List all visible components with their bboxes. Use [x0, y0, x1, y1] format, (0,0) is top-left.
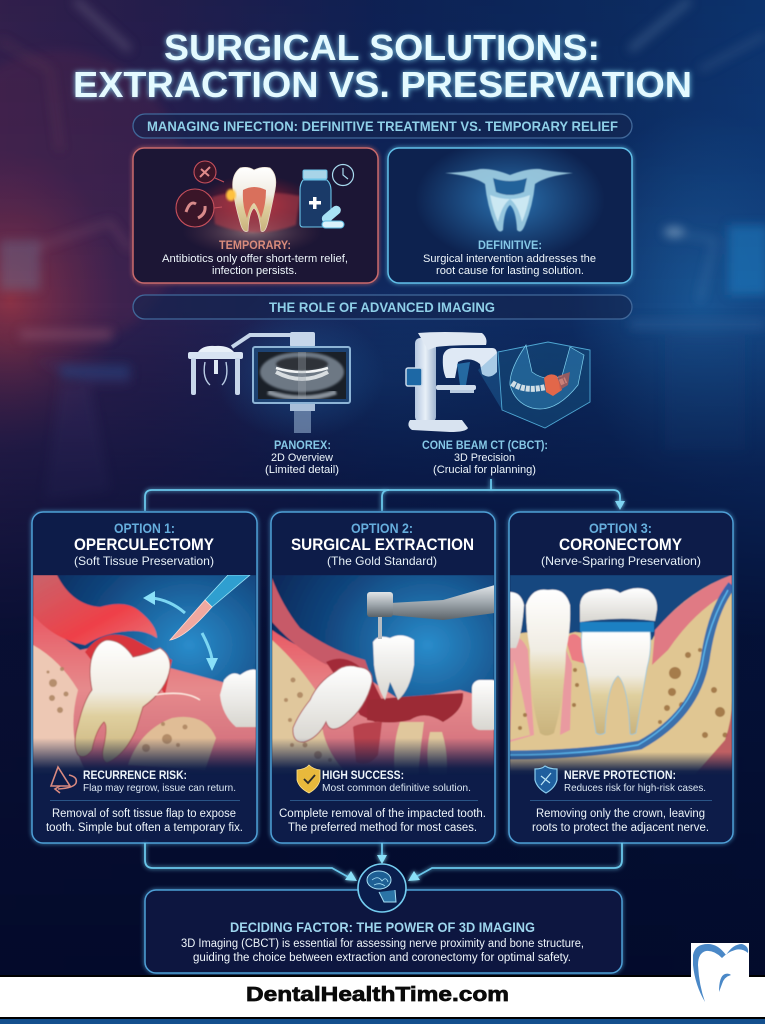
text: option 2 description: The preferred method for most cases. [288, 822, 477, 834]
text: panorex: 2D Overview [271, 452, 333, 464]
text: deciding factor [181, 919, 584, 964]
text: option 2 heading [291, 520, 474, 568]
3d cube with jaw scan [478, 342, 590, 428]
icon: gold shield check [297, 765, 320, 793]
text: temporary: Antibiotics only offer short-term relief, [162, 253, 348, 265]
section heading: advanced imaging: THE ROLE OF ADVANCED IMAGING [269, 300, 495, 315]
illustration: flap over wisdom tooth [33, 575, 256, 780]
text: option 3 heading: CORONECTOMY [559, 535, 683, 554]
icon: translucent tooth [445, 169, 573, 232]
text: nerve protection: Reduces risk for high-risk cases. [564, 782, 706, 794]
panel: option 1 operculectomy [32, 512, 257, 843]
text: option 2 description [279, 808, 486, 834]
text: panorex: (Limited detail) [265, 464, 339, 476]
title [73, 27, 692, 105]
icon: antibiotic bottle, clock and pill [300, 164, 354, 228]
text: temporary: TEMPORARY: [219, 240, 291, 252]
section heading: managing infection [133, 114, 632, 138]
text: recurrence risk: RECURRENCE RISK: [83, 768, 187, 782]
text: option 2 description: Complete removal of the impacted tooth. [279, 808, 486, 820]
text: option 3 description: Removing only the crown, leaving [536, 808, 705, 820]
cone beam ct machine [406, 332, 497, 432]
text: option 3 description [532, 808, 709, 834]
text: cbct: (Crucial for planning) [433, 464, 536, 476]
arrow: imaging connectors to options [145, 479, 625, 511]
text: panorex [265, 440, 339, 476]
panel: definitive solution [388, 138, 632, 283]
panel: option 3 coronectomy [509, 512, 733, 843]
section heading: advanced imaging [133, 295, 632, 319]
text: option 1 description: Removal of soft tissue flap to expose [52, 808, 236, 820]
x-ray image [258, 352, 346, 399]
panorex machine and x-ray monitor [188, 324, 366, 433]
icon: nerve shield [535, 766, 557, 793]
icon: scalpel [170, 575, 250, 640]
text: high success [322, 768, 471, 794]
text: cbct [422, 440, 548, 476]
text: high success: Most common definitive solution. [322, 782, 471, 794]
icon: dental handpiece [367, 585, 495, 639]
text: option 2 heading: OPTION 2: [351, 520, 413, 536]
text: definitive [423, 240, 596, 277]
text: temporary: infection persists. [212, 265, 297, 277]
illustration: crown removed above nerve [510, 575, 732, 780]
panel: option 2 surgical extraction [271, 512, 500, 843]
logo: tooth outline [691, 943, 749, 1002]
arrow: options to deciding factor [145, 843, 622, 881]
text: high success: HIGH SUCCESS: [322, 768, 404, 782]
text: recurrence risk [83, 768, 236, 794]
title: EXTRACTION VS. PRESERVATION [73, 64, 692, 105]
nerve canal [510, 585, 732, 755]
text: panorex: PANOREX: [274, 440, 331, 452]
text: definitive: root cause for lasting solution. [436, 265, 584, 277]
text: option 3 description: roots to protect the adjacent nerve. [532, 822, 709, 834]
text: nerve protection: NERVE PROTECTION: [564, 768, 676, 782]
text: recurrence risk: Flap may regrow, issue can return. [83, 782, 236, 794]
text: deciding factor: DECIDING FACTOR: THE POWER OF 3D IMAGING [230, 919, 535, 935]
panel: temporary relief [133, 148, 378, 283]
footer band [0, 975, 765, 1024]
arrows: flap removal [143, 591, 218, 671]
text: option 1 heading [74, 520, 215, 568]
text: deciding factor: guiding the choice between extraction and coronectomy for optimal safety. [193, 952, 571, 964]
text: cbct: CONE BEAM CT (CBCT): [422, 440, 548, 452]
icon: bacteria circles [176, 161, 224, 227]
text: option 1 heading: OPERCULECTOMY [74, 535, 215, 554]
text: nerve protection [564, 768, 706, 794]
icon: inflamed gum and tooth [212, 167, 300, 232]
text: option 1 description: tooth. Simple but often a temporary fix. [46, 822, 243, 834]
text: option 2 heading: (The Gold Standard) [327, 554, 437, 568]
illustration: tooth extraction [272, 575, 500, 780]
text: option 1 heading: (Soft Tissue Preservation) [74, 554, 214, 568]
text: option 3 heading: OPTION 3: [589, 520, 652, 536]
panel: deciding factor [145, 864, 622, 973]
icon: brain and jaw [358, 864, 406, 912]
section heading: managing infection: MANAGING INFECTION: DEFINITIVE TREATMENT VS. TEMPORARY RELIEF [147, 119, 618, 134]
text: option 2 heading: SURGICAL EXTRACTION [291, 535, 474, 554]
text: definitive: Surgical intervention addresses the [423, 253, 596, 265]
text: option 1 heading: OPTION 1: [114, 520, 175, 536]
icon: recurrence warning [51, 767, 76, 793]
text: option 3 heading [541, 520, 701, 568]
text: temporary [162, 240, 348, 277]
text: cbct: 3D Precision [454, 452, 515, 464]
text: deciding factor: 3D Imaging (CBCT) is essential for assessing nerve proximity and bone structure, [181, 938, 584, 950]
text: website: DentalHealthTime.com [246, 984, 509, 1006]
text: definitive: DEFINITIVE: [478, 240, 542, 252]
text: option 3 heading: (Nerve-Sparing Preservation) [541, 554, 701, 568]
text: option 1 description [46, 808, 243, 834]
title: SURGICAL SOLUTIONS: [164, 27, 600, 68]
